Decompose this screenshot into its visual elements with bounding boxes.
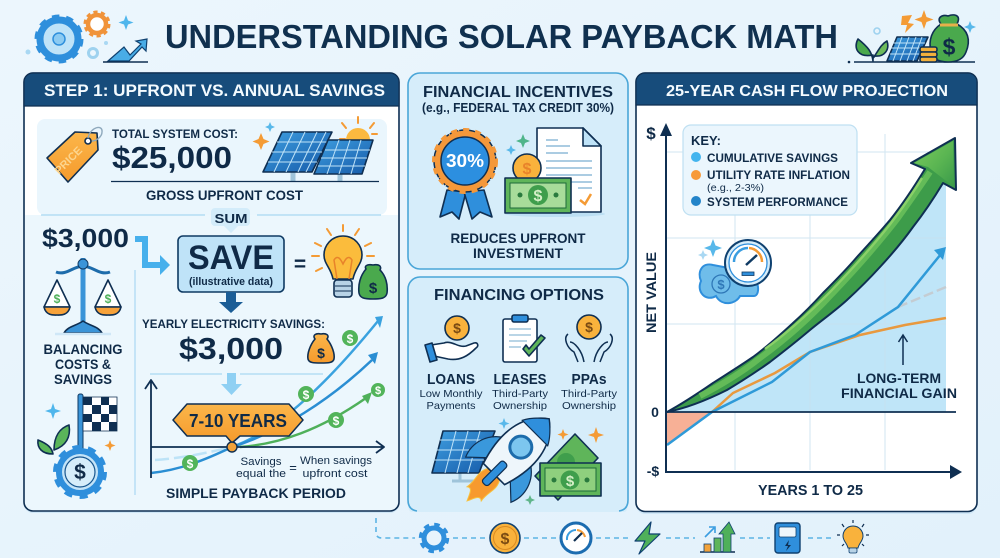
balancing costs and savings: SAVINGS [54, 372, 112, 387]
axis labels: YEARS 1 TO 25 [758, 483, 863, 499]
icon: checkered flag and gear [38, 394, 117, 496]
icon: document, coin and bill: $ [523, 161, 532, 178]
chart caption [236, 455, 373, 480]
option: loans: LOANS [427, 371, 475, 388]
divider [134, 270, 136, 495]
axis labels [643, 124, 863, 499]
icon: green money bag [359, 265, 387, 299]
long-term financial gain: LONG-TERM [857, 370, 941, 386]
upfront cost block [37, 119, 387, 215]
icon: orange money bag [308, 334, 334, 363]
balancing costs and savings: COSTS & [55, 357, 111, 372]
negative area [667, 412, 712, 444]
arrow: light down [221, 373, 242, 395]
icon: plant, solar panel, coins and money bag: $ [943, 34, 956, 60]
axis labels: 0 [651, 404, 659, 420]
panel heading: STEP 1: UPFRONT VS. ANNUAL SAVINGS [44, 82, 385, 100]
icon: solar panels and sun [252, 117, 377, 181]
panel: step 1 upfront vs annual savings: $3,000 [179, 331, 283, 366]
sum bubble [211, 208, 250, 233]
icon: rising bar chart [700, 522, 735, 552]
icon: light bulb [312, 225, 374, 297]
icon: lightning bolt [635, 522, 660, 554]
panel: step 1 upfront vs annual savings [24, 73, 399, 513]
icon: balance scale: $ [54, 292, 61, 306]
option: leases: Ownership [493, 400, 547, 412]
save box: SAVE [188, 239, 274, 277]
axes [666, 128, 952, 472]
blue savings line [667, 254, 941, 445]
chart caption: = [289, 460, 297, 475]
chart caption: equal the [236, 468, 286, 480]
panel: financial incentives [408, 73, 628, 269]
icon: price tag [47, 127, 102, 182]
legend key: UTILITY RATE INFLATION [707, 168, 850, 182]
gross upfront cost: GROSS UPFRONT COST [146, 188, 304, 203]
icon: balance scale [44, 258, 121, 334]
save box [178, 236, 284, 292]
dollar coins: $ [375, 385, 381, 397]
icon: document, coin and bill: $ [534, 188, 543, 205]
save box: (illustrative data) [189, 276, 273, 288]
axes [145, 380, 384, 478]
icon: gears and rising arrow [26, 12, 148, 62]
option: PPAs: Ownership [562, 400, 616, 412]
option: leases: LEASES [494, 371, 546, 388]
reduces upfront investment: REDUCES UPFRONT [450, 230, 586, 246]
annual amount: $3,000 [42, 223, 129, 253]
icon: orange money bag: $ [317, 345, 325, 361]
axis labels: $ [646, 124, 656, 143]
title: UNDERSTANDING SOLAR PAYBACK MATH [165, 19, 838, 56]
gauge icon: $ [717, 277, 725, 292]
icon: 30% rosette: 30% [446, 151, 484, 171]
area under curve [667, 183, 946, 412]
arrow: to save box [135, 236, 170, 275]
option: loans: Payments [426, 400, 476, 412]
yearly electricity savings: YEARLY ELECTRICITY SAVINGS: [142, 317, 325, 331]
icon: rocket [443, 394, 574, 525]
legend key [683, 125, 857, 215]
icon: coin: $ [501, 531, 510, 548]
legend key: CUMULATIVE SAVINGS [707, 151, 838, 165]
icon: electric meter [775, 523, 800, 553]
payback badge [173, 404, 303, 443]
axis labels: NET VALUE [643, 252, 659, 333]
heading: FINANCING OPTIONS [434, 287, 604, 304]
icon: light bulb [837, 520, 869, 553]
subheading: (e.g., FEDERAL TAX CREDIT 30%) [422, 101, 614, 115]
dashed projection line [898, 287, 946, 307]
simple payback period: SIMPLE PAYBACK PERIOD [166, 486, 346, 501]
connector dashes [376, 518, 835, 538]
icon: checkered flag and gear: $ [74, 461, 86, 484]
break-even point [227, 442, 237, 452]
option: PPAs [561, 315, 618, 412]
option: loans: $ [453, 320, 461, 336]
icon: cash stack: $ [566, 473, 575, 490]
icon: cash stack [525, 427, 604, 505]
icon: balance scale: $ [105, 292, 112, 306]
curves [155, 447, 232, 460]
payback chart: 7-10 YEARS [189, 411, 287, 431]
dollar coins [182, 330, 385, 471]
legend key: (e.g., 2-3%) [707, 183, 764, 194]
icon: gauge [561, 523, 591, 553]
balancing costs and savings: BALANCING [44, 342, 122, 357]
option: leases: Third-Party [492, 388, 549, 400]
equals sign: = [294, 253, 306, 276]
option: leases [492, 315, 549, 412]
dollar coins: $ [347, 332, 354, 346]
icon: 30% rosette [434, 130, 496, 219]
dollar coins: $ [333, 414, 340, 428]
arrow: long-term gain [898, 335, 908, 365]
chart caption: When savings [300, 455, 373, 467]
panel frame [636, 75, 977, 514]
chart caption: upfront cost [302, 468, 368, 480]
option: loans: Low Monthly [420, 388, 483, 400]
sum bubble: SUM [214, 211, 248, 226]
chart caption: Savings [240, 456, 282, 468]
orange utility rate line [712, 318, 946, 412]
icon: green money bag: $ [369, 280, 378, 297]
gauge icon [698, 239, 771, 303]
green cumulative arrow [667, 138, 956, 412]
balancing costs and savings [44, 342, 122, 387]
panel heading: 25-YEAR CASH FLOW PROJECTION [666, 83, 948, 100]
option: loans [420, 316, 483, 412]
option: PPAs: $ [585, 319, 593, 335]
axis labels: -$ [647, 463, 659, 479]
dollar coins: $ [187, 457, 194, 471]
icon: document, coin and bill [505, 128, 605, 217]
total system cost: TOTAL SYSTEM COST: [112, 127, 238, 141]
icon: price tag: PRICE [53, 145, 85, 177]
payback chart [145, 316, 385, 480]
arrow: save to yearly savings [219, 292, 243, 313]
long-term financial gain: FINANCIAL GAIN [841, 385, 957, 401]
long-term financial gain [841, 370, 957, 401]
icon: gear [420, 524, 448, 552]
option: PPAs: PPAs [572, 371, 606, 388]
legend key: KEY: [691, 134, 721, 148]
reduces upfront investment [450, 230, 586, 261]
icon: plant, solar panel, coins and money bag [848, 10, 976, 63]
grid [667, 125, 946, 470]
panel: step 1 upfront vs annual savings: $25,000 [112, 140, 232, 175]
option: PPAs: Third-Party [561, 388, 618, 400]
bottom icon strip [376, 518, 869, 554]
reduces upfront investment: INVESTMENT [473, 245, 563, 261]
panel: financing options [408, 277, 628, 525]
cost rule [111, 180, 379, 182]
panel frame [24, 75, 399, 513]
icon: solar panel [432, 418, 510, 481]
icon: coin [490, 523, 520, 553]
dollar coins: $ [303, 388, 310, 402]
legend key: SYSTEM PERFORMANCE [707, 195, 848, 209]
heading: FINANCIAL INCENTIVES [423, 84, 613, 101]
panel: 25-year cash flow projection [636, 73, 977, 514]
